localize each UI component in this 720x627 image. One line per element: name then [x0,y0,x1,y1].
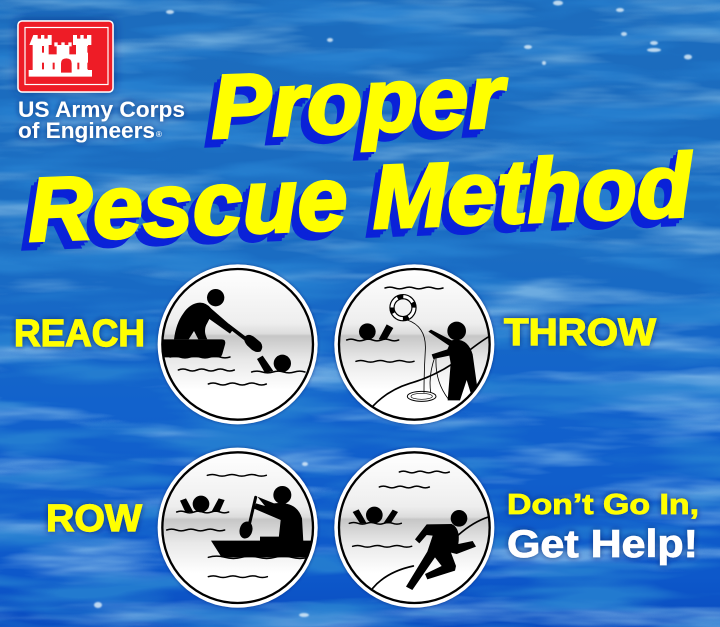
title line: Proper: Proper [209,47,511,158]
panel: reach and throw icons [158,264,494,424]
swimmer [359,323,393,340]
label: Don't Go In, Get Help! [507,489,699,566]
rower [254,486,303,542]
logo wordmark: of Engineers [18,118,155,143]
rescuer in boat [174,289,234,339]
swimmer [257,355,291,373]
title line: Rescue Method: Rescue Method [24,138,693,263]
waves [167,474,308,577]
waves [170,356,305,385]
logo wordmark [18,97,185,143]
title line: Proper: Proper [204,52,506,163]
swimmer [180,496,225,512]
title line: Rescue Method: Rescue Method [21,141,690,266]
logo wordmark: US Army Corps [18,97,185,122]
rescuer on shore [428,322,477,400]
label: Don't Go In, Get Help!: Get Help! [507,523,698,566]
icon: get help circle [334,448,494,608]
waves [349,471,449,547]
rope [407,320,448,401]
label: ROW: ROW [46,498,142,540]
waves [347,287,443,362]
running person [406,510,476,590]
title line: Rescue Method: Rescue Method [26,136,695,261]
life ring [392,297,414,319]
icon: red castle badge [18,21,113,92]
title [18,47,696,269]
label: Don't Go In, Get Help!: Don’t Go In, [507,489,699,521]
shoreline [373,335,492,406]
icon: reach rescue circle [158,264,318,424]
shoreline [373,517,489,588]
boat [211,537,315,557]
paddle [238,497,256,540]
boat [160,339,225,357]
swimmer [353,507,398,523]
panel: row and run icons [158,448,494,608]
icon: row rescue circle [158,448,318,608]
label: REACH: REACH [14,313,145,355]
label: THROW: THROW [504,312,656,354]
logo: US Army Corps of Engineers [18,21,185,143]
paddle [228,326,262,352]
title line: Proper: Proper [201,55,503,166]
logo wordmark: ® [156,130,162,139]
title line: Rescue Method: Rescue Method [18,144,688,269]
icon: throw rescue circle [334,264,494,424]
title line: Proper: Proper [207,49,509,160]
